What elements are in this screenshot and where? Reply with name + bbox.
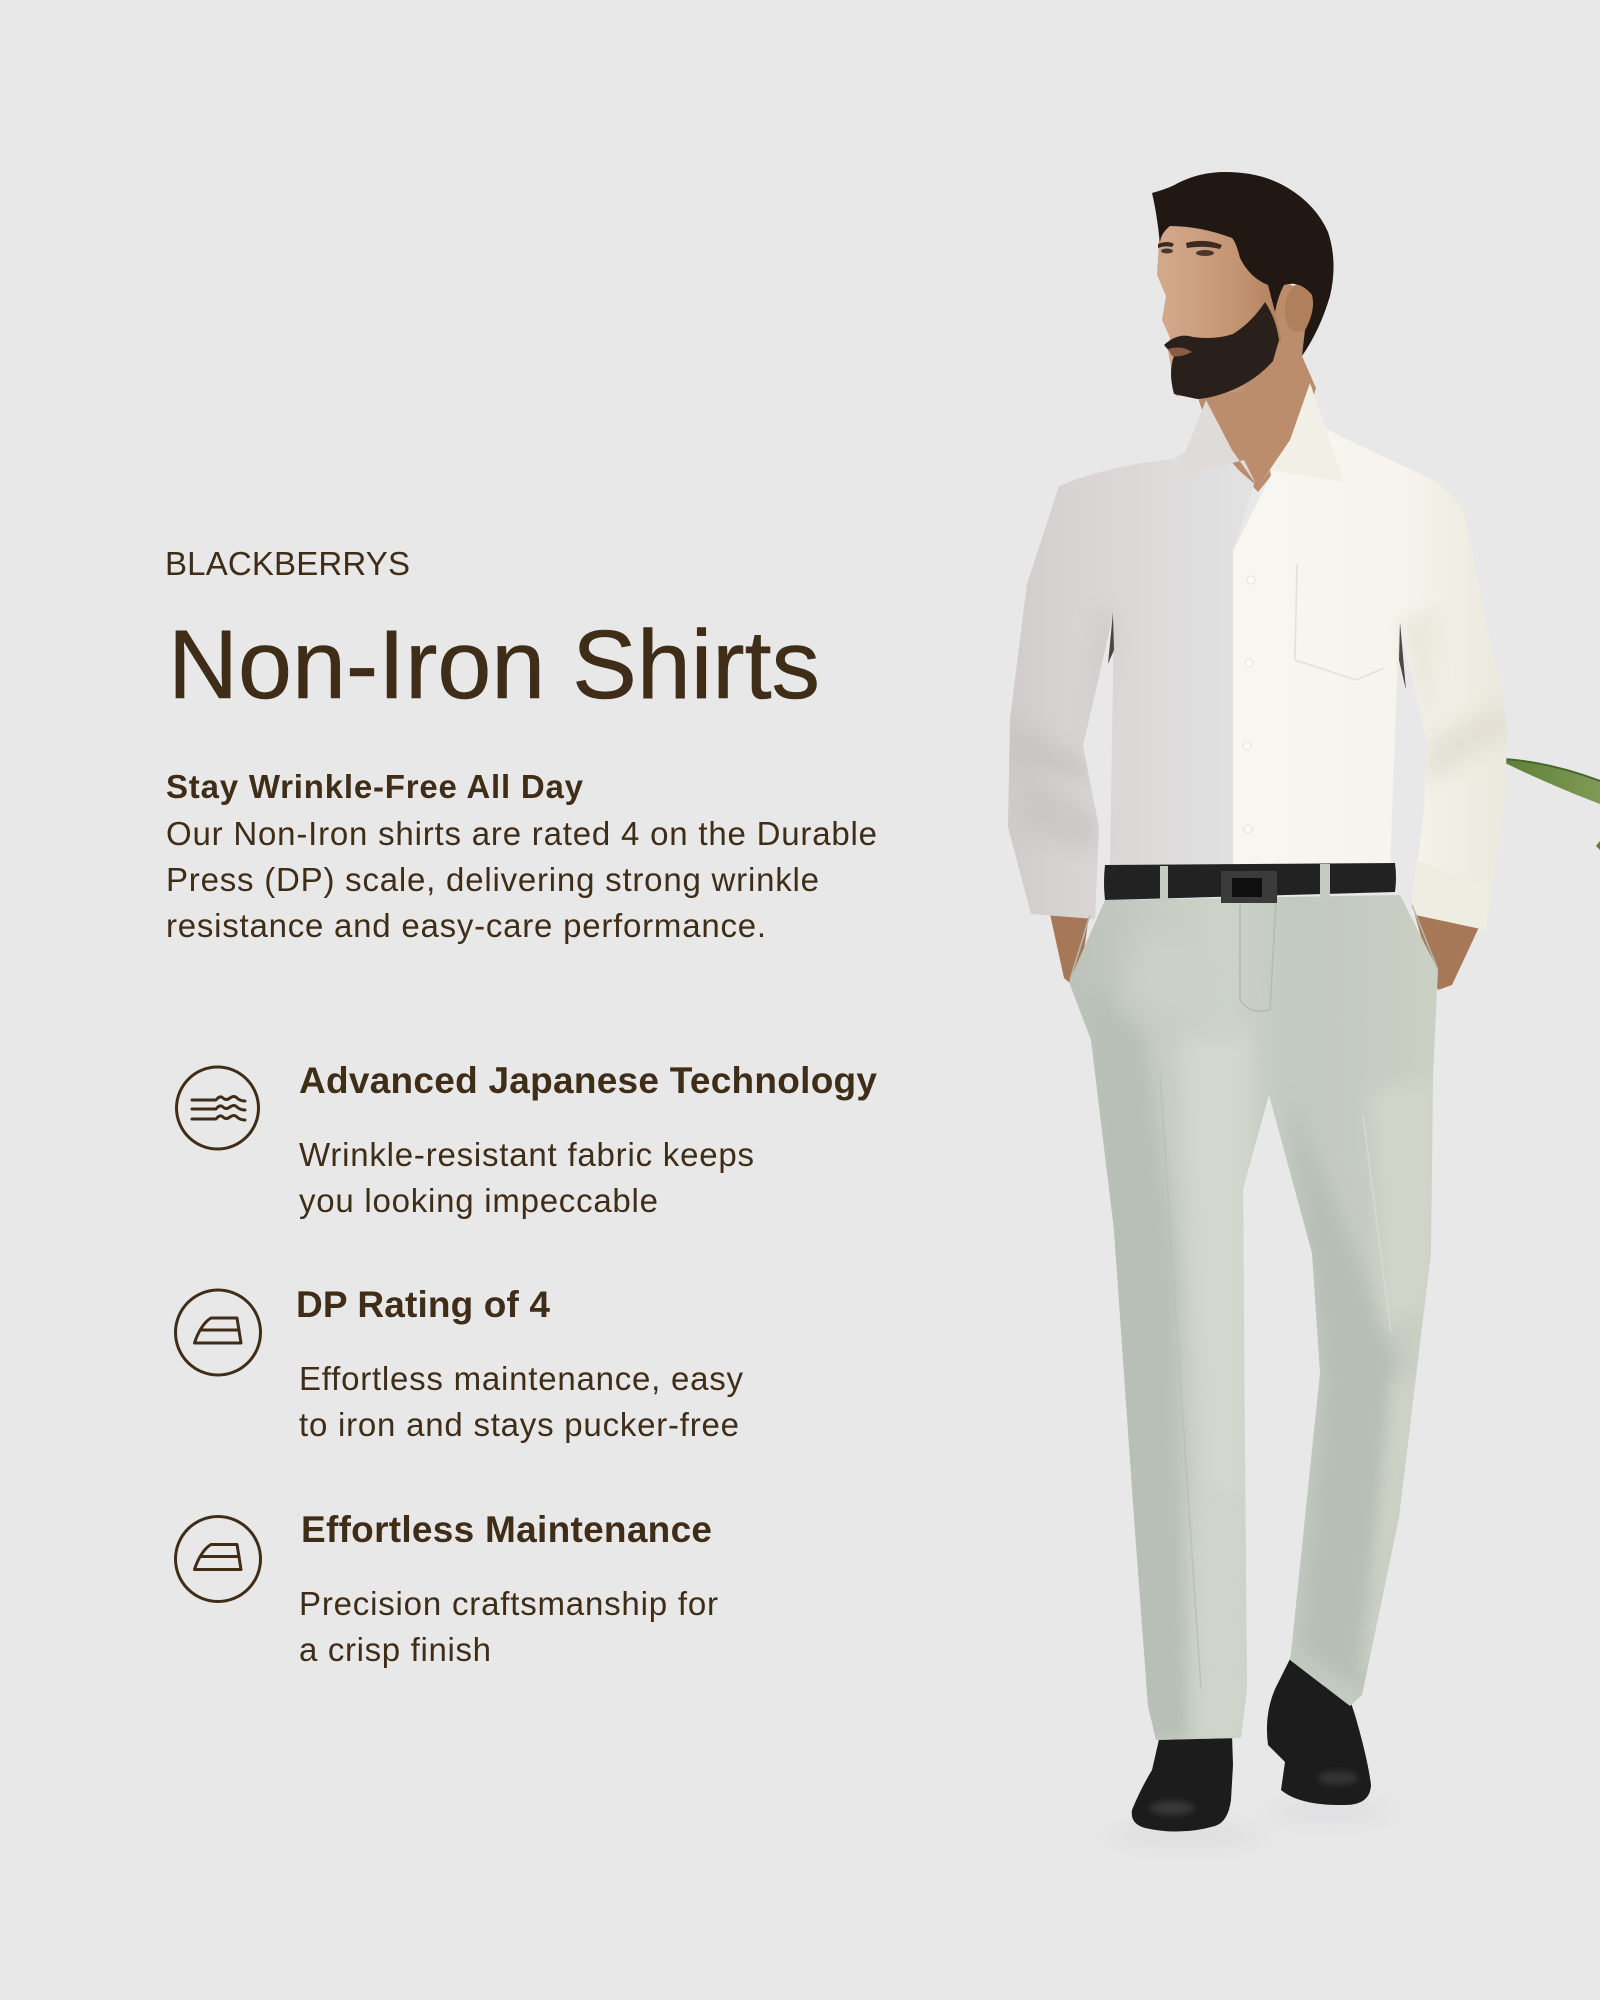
face <box>1157 222 1282 396</box>
buttons <box>1243 576 1255 833</box>
feature description <box>299 1360 744 1443</box>
feature description <box>299 1136 754 1219</box>
eyes and brows <box>1158 241 1222 256</box>
feature description: to iron and stays pucker-free <box>299 1406 739 1443</box>
feature heading: DP Rating of 4 <box>296 1284 550 1325</box>
trouser shading <box>1092 1014 1414 1740</box>
left shoe highlight <box>1150 1801 1194 1815</box>
hands in pockets <box>1048 905 1480 990</box>
right cuff <box>1411 860 1489 930</box>
model figure <box>1000 172 1520 1844</box>
sleeve folds <box>1017 618 1502 842</box>
feature description <box>299 1585 718 1668</box>
intro paragraph <box>166 815 877 944</box>
feature description: Wrinkle-resistant fabric keeps <box>299 1136 754 1173</box>
collar <box>1175 383 1344 487</box>
shirt right panel <box>1233 430 1520 940</box>
title: Non-Iron Shirts <box>168 610 820 719</box>
intro subheading: Stay Wrinkle-Free All Day <box>166 768 584 805</box>
belt <box>1104 863 1396 903</box>
shirt <box>1000 383 1520 940</box>
feature heading: Advanced Japanese Technology <box>299 1060 877 1101</box>
icon: iron <box>176 1290 260 1375</box>
feature: DP Rating of 4 <box>176 1284 744 1443</box>
hair <box>1152 172 1334 356</box>
floor shadow <box>1105 1805 1395 1844</box>
belt loops <box>1160 864 1330 902</box>
icon: fabric waves <box>176 1067 258 1149</box>
intro paragraph: Our Non-Iron shirts are rated 4 on the Durable <box>166 815 877 852</box>
intro text block <box>166 768 877 944</box>
plant leaf <box>1503 759 1600 850</box>
neck <box>1197 282 1316 492</box>
feature description: a crisp finish <box>299 1631 491 1668</box>
feature description: you looking impeccable <box>299 1182 658 1219</box>
icon: iron <box>176 1516 260 1602</box>
left shoe <box>1132 1735 1233 1832</box>
feature heading: Effortless Maintenance <box>301 1509 712 1550</box>
feature description: Effortless maintenance, easy <box>299 1360 744 1397</box>
ear <box>1282 280 1318 334</box>
shirt base <box>1008 452 1254 919</box>
pocket <box>1295 564 1384 680</box>
brand label: BLACKBERRYS <box>165 545 410 582</box>
pockets and fly <box>1070 900 1438 1011</box>
intro paragraph: Press (DP) scale, delivering strong wrinkle <box>166 861 819 898</box>
lips <box>1168 348 1192 356</box>
right shoe <box>1267 1655 1371 1805</box>
feature description: Precision craftsmanship for <box>299 1585 718 1622</box>
feature: Effortless Maintenance <box>176 1509 718 1668</box>
head <box>1152 172 1334 399</box>
intro paragraph: resistance and easy-care performance. <box>166 907 766 944</box>
right shoe highlight <box>1318 1771 1358 1785</box>
armpit shadows <box>1108 612 1406 690</box>
buckle <box>1221 871 1277 903</box>
beard <box>1164 302 1279 399</box>
feature: Advanced Japanese Technology <box>176 1060 877 1219</box>
shoes <box>1132 1655 1371 1832</box>
trousers <box>1069 895 1438 1740</box>
